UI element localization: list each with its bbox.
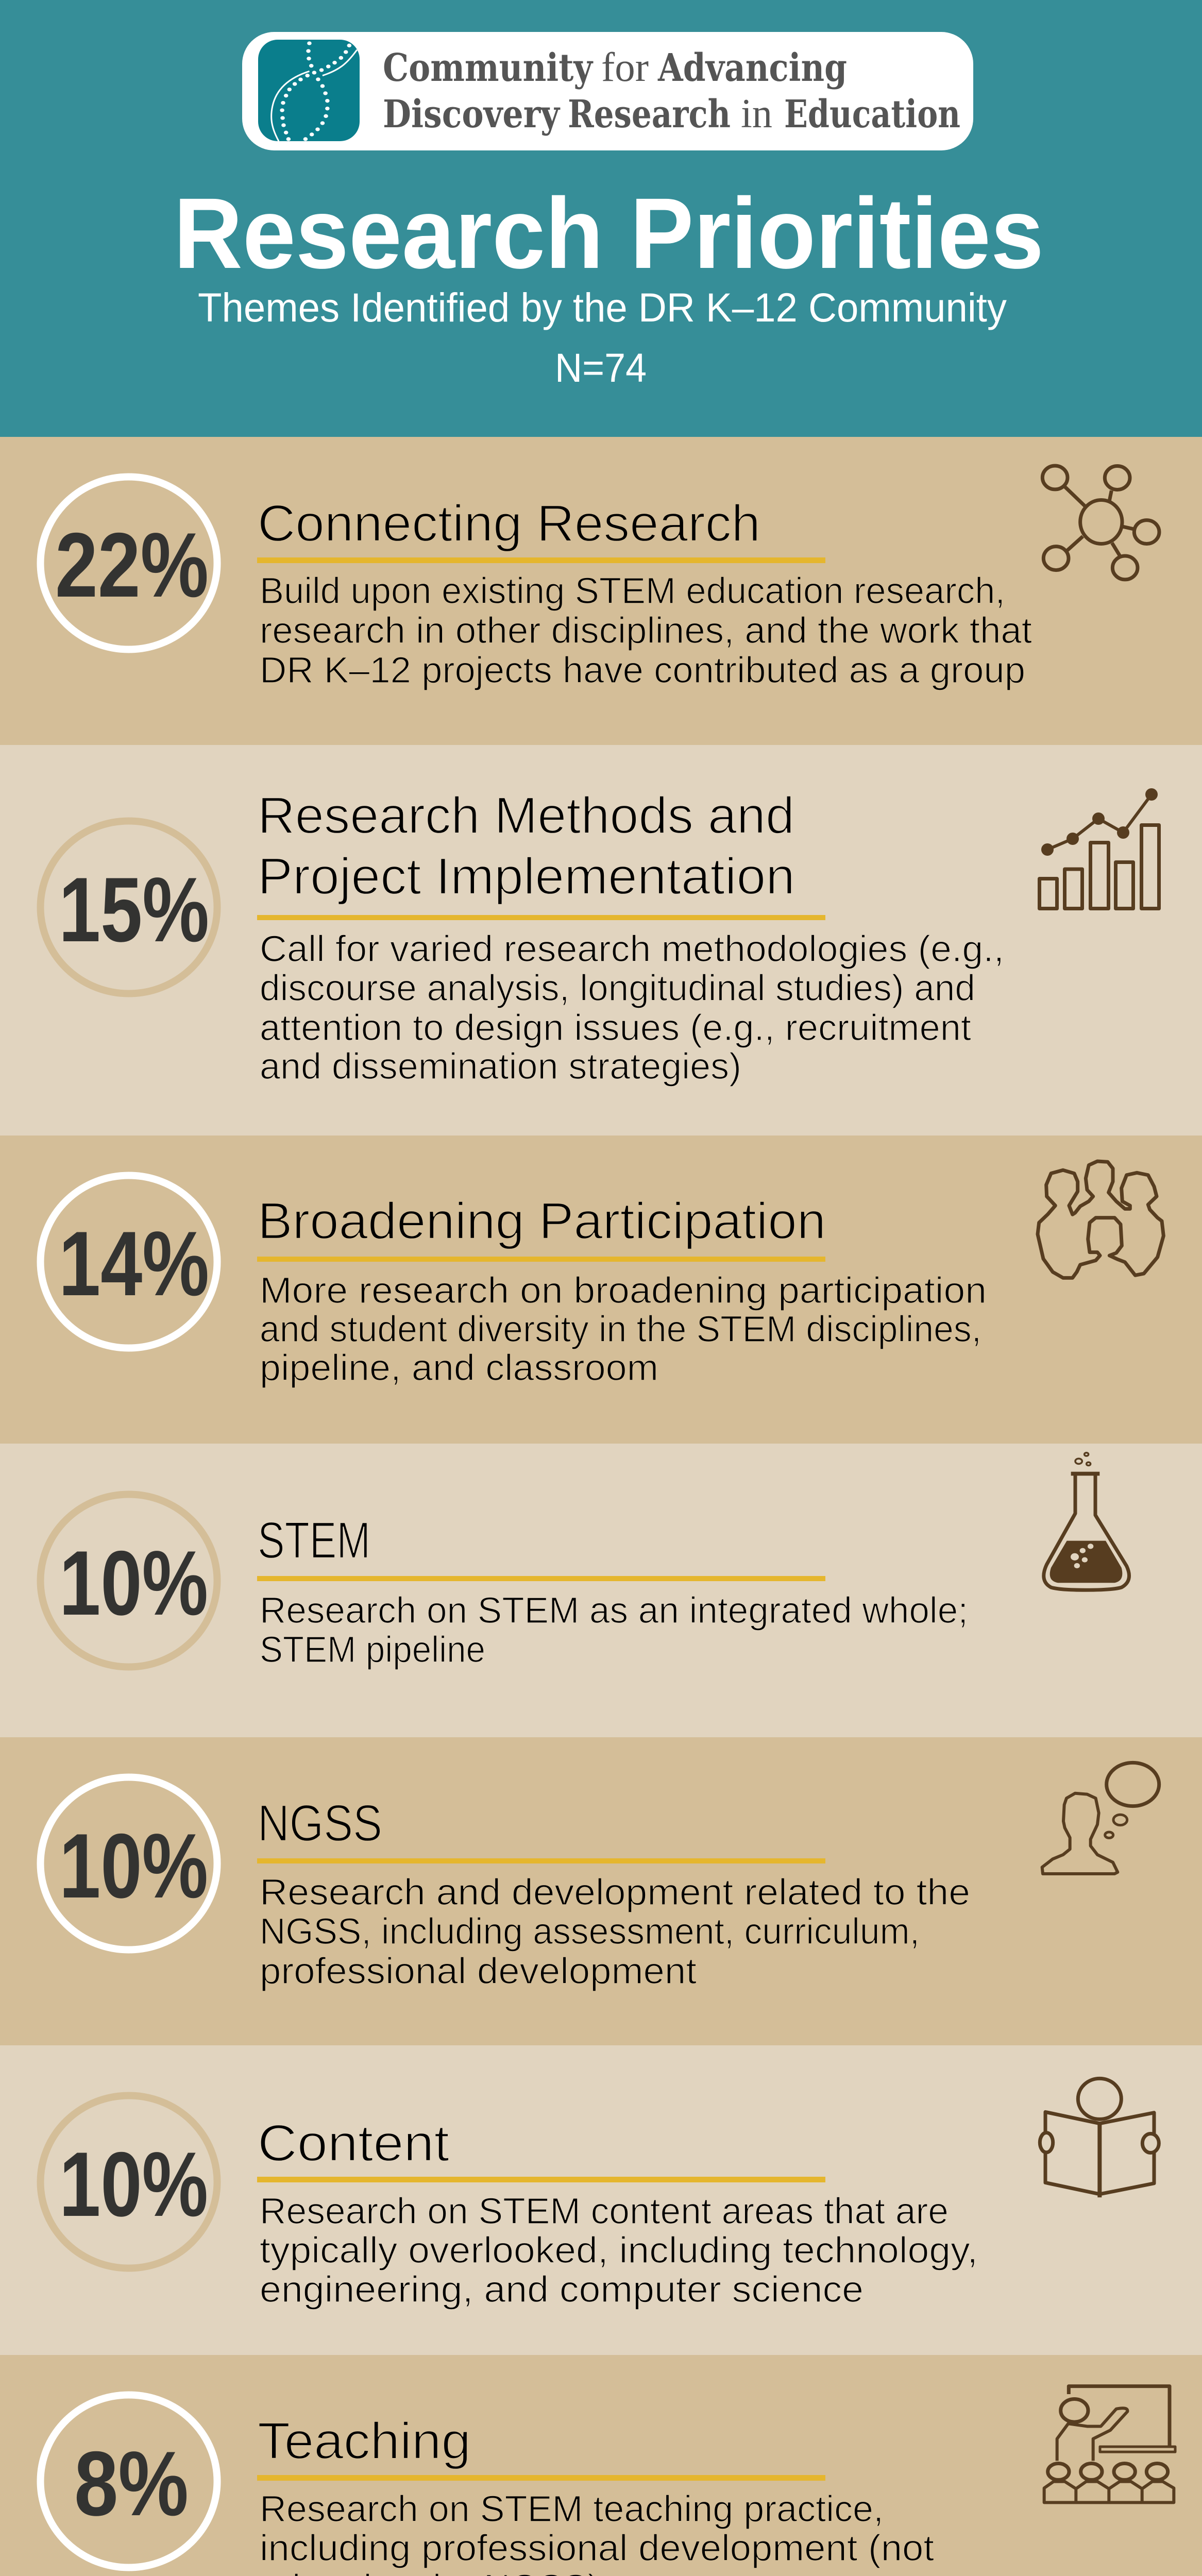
- icon: network: [1042, 466, 1159, 580]
- icon: teacher with students: [1044, 2386, 1175, 2502]
- description: engineering, and computer science: [260, 2269, 864, 2310]
- description: Research on STEM teaching practice,: [260, 2489, 884, 2530]
- panel: NGSS: [0, 1737, 1202, 2045]
- heading: [258, 787, 795, 905]
- description: Build upon existing STEM education research,: [260, 571, 1005, 612]
- description: discourse analysis, longitudinal studies) and: [260, 968, 975, 1009]
- heading: Research Methods and: [258, 787, 794, 844]
- description: Research and development related to the: [260, 1872, 970, 1913]
- icon: person reading: [1040, 2078, 1159, 2197]
- description: and student diversity in the STEM disciplines,: [260, 1309, 981, 1350]
- logo wordmark: in: [741, 91, 772, 137]
- description: [260, 1270, 987, 1388]
- heading: Content: [258, 2114, 449, 2172]
- percentage badge: 10%: [59, 1532, 208, 1634]
- description: and dissemination strategies): [260, 1046, 741, 1087]
- percentage badge: [40, 2395, 217, 2568]
- description: attention to design issues (e.g., recruitment: [260, 1008, 971, 1048]
- subtitle: Themes Identified by the DR K–12 Community: [198, 284, 1007, 330]
- logo wordmark: for: [601, 45, 649, 90]
- percentage badge: [40, 2096, 217, 2268]
- description: Research on STEM content areas that are: [260, 2191, 949, 2232]
- description: including professional development (not: [260, 2528, 934, 2569]
- description: [260, 571, 1032, 691]
- logo: [242, 32, 973, 150]
- panel: header: [0, 0, 1202, 437]
- description: [260, 929, 1004, 1087]
- logo wordmark: Community: [383, 46, 594, 90]
- percentage badge: [40, 1777, 217, 1950]
- logo wordmark: Research: [568, 92, 731, 137]
- heading: Teaching: [258, 2412, 471, 2470]
- description: [260, 1872, 970, 1992]
- sample size: N=74: [555, 345, 647, 391]
- heading: Broadening Participation: [258, 1192, 826, 1250]
- heading: NGSS: [258, 1794, 382, 1852]
- description: pipeline, and classroom: [260, 1348, 658, 1388]
- description: Call for varied research methodologies (e.g.,: [260, 929, 1004, 970]
- icon: person thinking: [1042, 1762, 1159, 1874]
- logo wordmark: Discovery: [383, 92, 561, 137]
- description: DR K–12 projects have contributed as a group: [260, 650, 1025, 691]
- panel: Connecting Research: [0, 437, 1202, 745]
- heading: Project Implementation: [258, 848, 795, 905]
- logo wordmark: [383, 45, 960, 137]
- percentage badge: [40, 477, 217, 649]
- panel: Teaching: [0, 2355, 1202, 2576]
- percentage badge: 8%: [74, 2432, 189, 2535]
- heading: STEM: [258, 1512, 370, 1569]
- icon: flask: [1044, 1453, 1129, 1590]
- percentage badge: [40, 821, 217, 993]
- description: STEM pipeline: [260, 1630, 485, 1670]
- percentage badge: 10%: [59, 2133, 208, 2235]
- icon: logo mark with DNA strands: [258, 40, 360, 141]
- panel: STEM: [0, 1444, 1202, 1737]
- percentage badge: 15%: [59, 858, 209, 961]
- description: research in other disciplines, and the work that: [260, 611, 1032, 651]
- description: NGSS, including assessment, curriculum,: [260, 1911, 920, 1952]
- logo wordmark: Education: [784, 92, 960, 137]
- percentage badge: 14%: [59, 1212, 209, 1315]
- percentage badge: [40, 1494, 217, 1667]
- description: [260, 1590, 968, 1670]
- description: More research on broadening participation: [260, 1270, 987, 1311]
- percentage badge: 22%: [55, 514, 209, 616]
- percentage badge: [40, 1176, 217, 1348]
- description: Research on STEM as an integrated whole;: [260, 1590, 968, 1631]
- title: Research Priorities: [174, 177, 1044, 290]
- icon: bar and line chart: [1040, 788, 1159, 909]
- panel: Research Methods and Project Implementation: [0, 745, 1202, 1136]
- percentage badge: 10%: [59, 1815, 208, 1917]
- description: typically overlooked, including technology,: [260, 2230, 978, 2271]
- icon: group of people: [1038, 1161, 1163, 1278]
- panel: Content: [0, 2045, 1202, 2355]
- panel: Broadening Participation: [0, 1136, 1202, 1444]
- description: [260, 2191, 978, 2310]
- heading: Connecting Research: [258, 495, 760, 552]
- logo wordmark: Advancing: [657, 46, 847, 90]
- description: [260, 2489, 934, 2576]
- description: professional development: [260, 1951, 697, 1992]
